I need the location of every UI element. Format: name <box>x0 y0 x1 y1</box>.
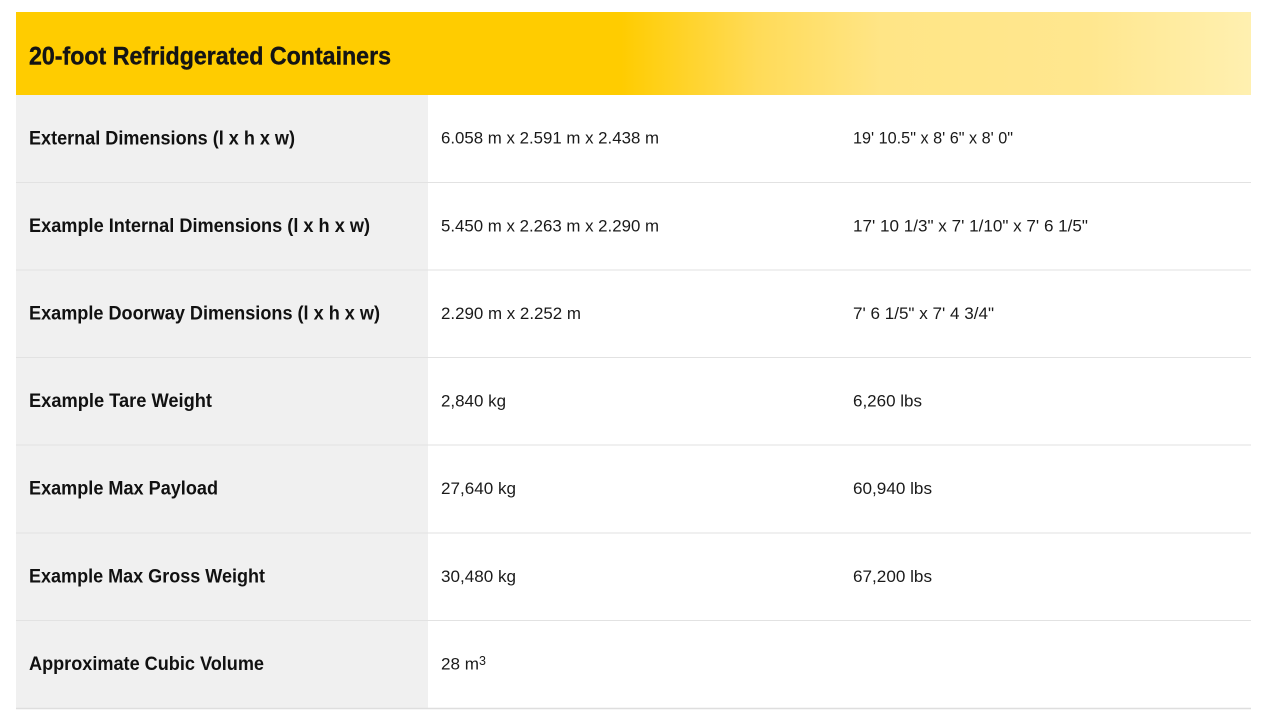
row: max gross weight: 30,480 kg <box>441 567 516 586</box>
row: doorway dimensions: 7' 6 1/5" x 7' 4 3/4" <box>853 304 994 323</box>
row: cubic volume <box>16 654 1251 708</box>
row: doorway dimensions: 2.290 m x 2.252 m <box>441 304 581 323</box>
row: tare weight: 6,260 lbs <box>853 392 922 410</box>
row: max payload <box>16 478 1251 533</box>
row: cubic volume: Approximate Cubic Volume <box>29 654 264 675</box>
row: internal dimensions <box>16 216 1251 270</box>
row: internal dimensions: 5.450 m x 2.263 m x 2.290 m <box>441 216 659 236</box>
row: cubic volume: 28 m <box>441 654 479 674</box>
row: internal dimensions: Example Internal Dimensions (l x h x w) <box>29 216 370 237</box>
row: external dimensions: 19' 10.5" x 8' 6" x 8' 0" <box>853 128 1013 148</box>
panel: table header <box>16 12 1251 95</box>
row: external dimensions <box>16 128 1251 182</box>
row: max gross weight <box>16 566 1251 620</box>
row: max payload: 27,640 kg <box>441 479 516 498</box>
row: tare weight: Example Tare Weight <box>29 391 213 412</box>
row: tare weight: 2,840 kg <box>441 392 506 410</box>
row: cubic volume: 3 <box>479 654 486 668</box>
row: max payload: Example Max Payload <box>29 478 218 500</box>
row: external dimensions: External Dimensions (l x h x w) <box>29 128 295 150</box>
row: doorway dimensions: Example Doorway Dimensions (l x h x w) <box>29 304 380 324</box>
row: doorway dimensions <box>16 304 1251 358</box>
title: 20-foot Refridgerated Containers <box>29 42 391 70</box>
row: internal dimensions: 17' 10 1/3" x 7' 1/10" x 7' 6 1/5" <box>853 216 1088 236</box>
row: max gross weight: Example Max Gross Weight <box>29 566 266 588</box>
row: max payload: 60,940 lbs <box>853 479 932 498</box>
row: tare weight <box>16 391 1251 445</box>
panel: label column background <box>16 95 428 708</box>
row: max gross weight: 67,200 lbs <box>853 567 932 586</box>
row: external dimensions: 6.058 m x 2.591 m x 2.438 m <box>441 128 659 148</box>
